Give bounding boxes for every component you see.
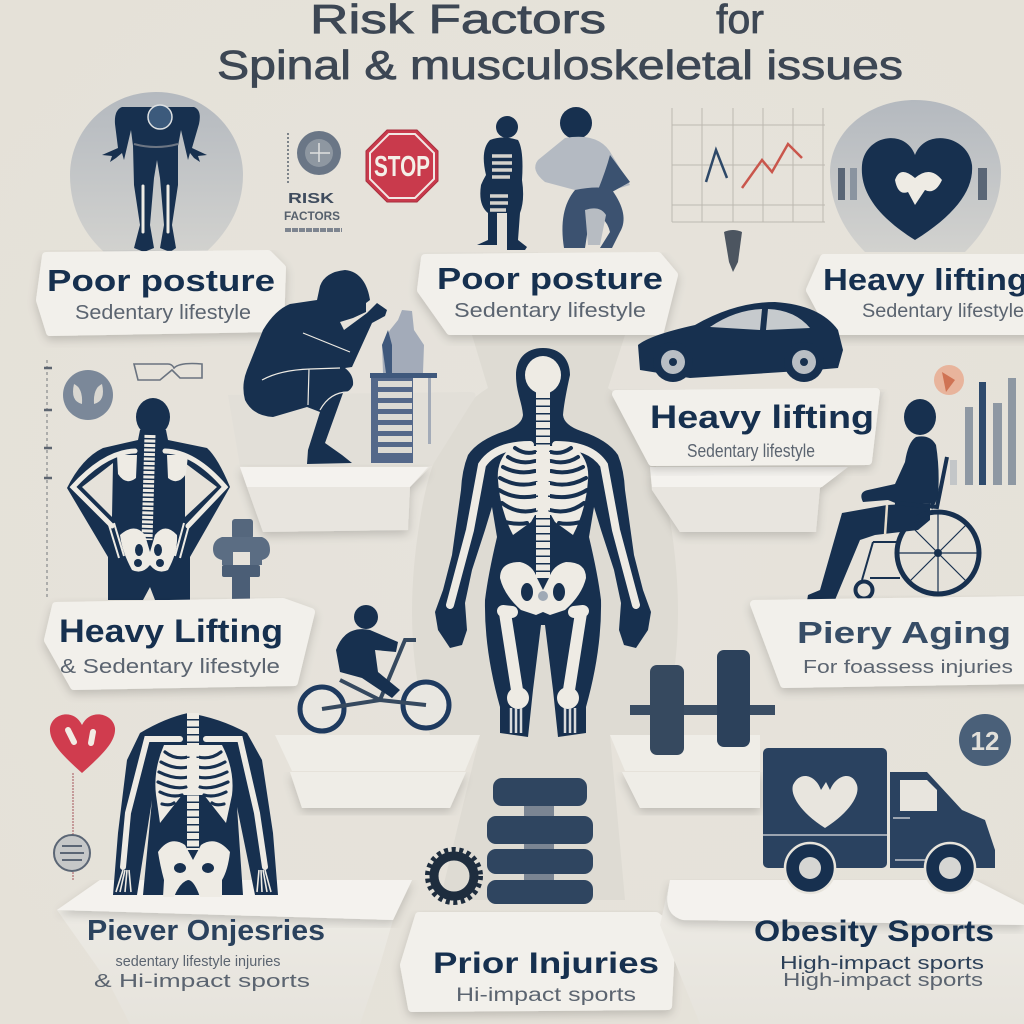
subtext: High-impact sports (780, 953, 984, 973)
arm bones (123, 739, 265, 867)
subtext: For foassess injuries (803, 657, 1013, 677)
icon: central skeleton body (435, 348, 651, 737)
icon: heart disc (830, 100, 1001, 252)
icon: badge right (959, 714, 1011, 766)
title (217, 0, 903, 88)
pelvis (158, 841, 230, 897)
panel: heavy lifting top right (810, 258, 1024, 331)
heading: Poor posture (437, 261, 663, 296)
pelvis (500, 562, 586, 615)
panel: heavy lifting center right (616, 392, 876, 462)
subtext: Hi-impact sports (456, 985, 636, 1006)
title: Spinal & musculoskeletal issues (217, 42, 903, 88)
heading: Poor posture (47, 263, 275, 298)
panel: obesity sports right: High-impact sports (783, 970, 983, 990)
icon: crouching figure at desk (243, 270, 437, 464)
icon: wheelchair user (807, 399, 979, 601)
icon: delivery truck (763, 748, 995, 893)
icon: badge right: 12 (971, 726, 999, 756)
heading: Heavy lifting (823, 262, 1024, 297)
subtext: Sedentary lifestyle (687, 441, 815, 461)
subtext: Sedentary lifestyle (454, 300, 646, 322)
subtext: sedentary lifestyle injuries (116, 953, 280, 970)
icon: two seated figures (477, 107, 630, 250)
icon: horizontal dumbbell (630, 650, 775, 755)
icon: ribcage torso (113, 713, 278, 897)
icon: risk badge (284, 131, 342, 230)
icon: red heart and gauge (50, 714, 115, 880)
panel: piever onjesries left (57, 880, 412, 1024)
heading: Piery Aging (797, 615, 1011, 650)
skull (525, 356, 561, 394)
rib gaps (499, 448, 587, 524)
body silhouette (435, 348, 651, 737)
spine (536, 392, 550, 578)
icon: stop sign (366, 130, 438, 202)
panel: obesity sports right (660, 880, 1024, 1024)
subtext: & Sedentary lifestyle (60, 656, 280, 678)
subtext: Sedentary lifestyle (75, 302, 251, 324)
shoulders and arms (450, 445, 530, 605)
spine (187, 713, 199, 850)
panel: poor posture left (40, 92, 282, 332)
icon: spine discs (487, 778, 593, 904)
panel: poor posture center (421, 256, 674, 331)
icon: dumbbell upright (213, 519, 270, 600)
icon: stop sign: STOP (374, 151, 430, 183)
heading: Heavy Lifting (59, 613, 283, 649)
ribs (155, 745, 233, 823)
heading: Obesity Sports (754, 915, 994, 948)
icon: back skeleton (67, 398, 230, 600)
legs (503, 611, 583, 690)
small icons left: ruler, nose badge and glasses (44, 360, 202, 600)
subtext: Sedentary lifestyle (862, 301, 1024, 322)
panel: heavy lifting left (48, 602, 311, 686)
steps: central plinths (228, 335, 885, 900)
icon: risk badge: RISK (288, 190, 334, 207)
heading: Prior Injuries (433, 947, 659, 980)
icon: standing figure in disc (70, 92, 243, 253)
label plate (40, 254, 282, 332)
panel: piery aging right (754, 600, 1024, 684)
rib cage (498, 446, 588, 535)
icon: risk badge: FACTORS (284, 209, 340, 223)
panel: prior injuries center (404, 916, 672, 1008)
icon: cyclist (300, 605, 449, 731)
chart: bars right (934, 365, 1016, 485)
chart: line graph (672, 108, 825, 272)
panel: piever onjesries left: & Hi-impact sports (94, 971, 310, 991)
heading: Heavy lifting (650, 399, 874, 435)
icon: car (638, 302, 843, 382)
heading: Piever Onjesries (87, 915, 325, 947)
icon: gear (428, 850, 480, 902)
